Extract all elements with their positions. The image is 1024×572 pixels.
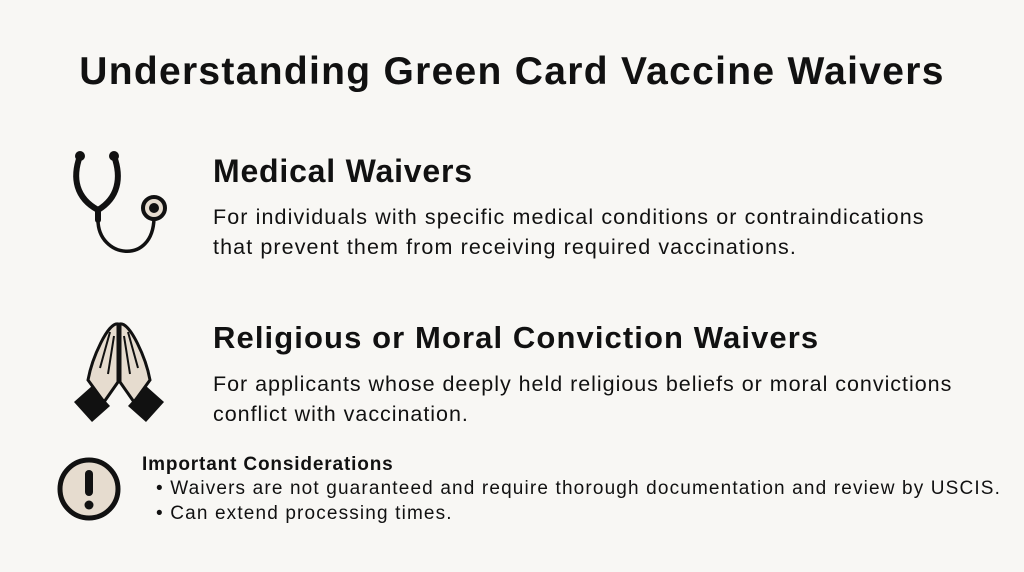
icon: praying hands [74,322,164,422]
bullets [156,478,1001,524]
text: medical: For individuals with specific medical conditions or contraindications [213,205,925,229]
text: religious [213,372,952,426]
text: medical [213,205,925,259]
considerations block [142,454,1001,524]
heading: medical: Medical Waivers [213,153,473,189]
bullets: • Can extend processing times. [156,503,453,524]
heading: religious: Religious or Moral Conviction Waivers [213,320,819,355]
heading: considerations: Important Considerations [142,454,394,475]
bullets: • Waivers are not guaranteed and require thorough documentation and review by USCIS. [156,478,1001,499]
title: Understanding Green Card Vaccine Waivers [79,50,945,93]
icon: exclamation [58,458,120,520]
text: medical: that prevent them from receiving required vaccinations. [213,235,797,259]
text: religious: conflict with vaccination. [213,402,469,426]
icon: stethoscope [73,151,167,253]
text: religious: For applicants whose deeply held religious beliefs or moral convictions [213,372,952,396]
